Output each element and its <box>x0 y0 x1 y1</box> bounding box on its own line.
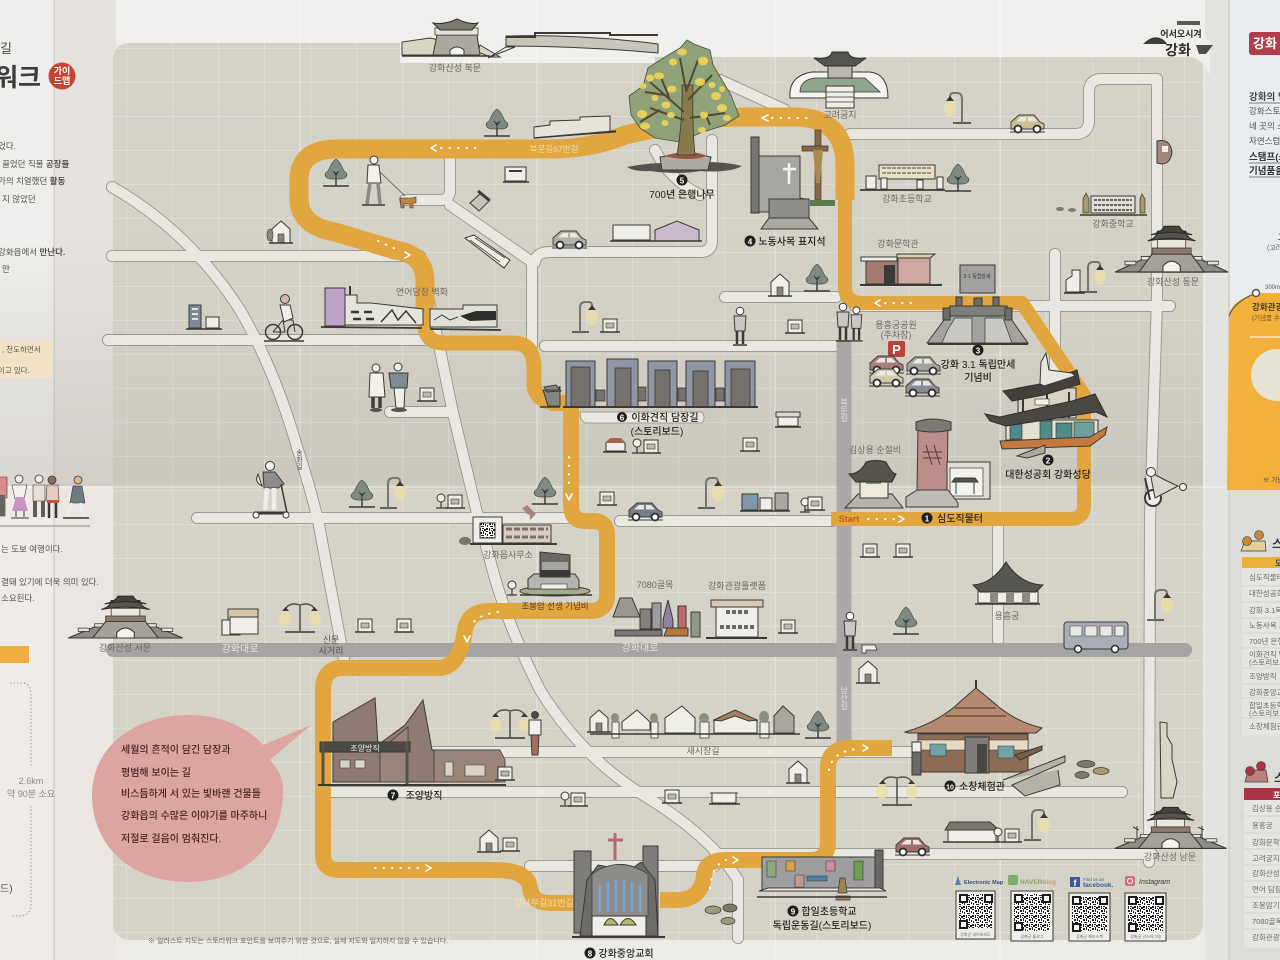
illustration: speech bubble: 세월의 흔적이 담긴 담장과 <box>121 743 231 756</box>
illustration: man with dog, tree and bus <box>843 590 1173 653</box>
QR: electronic map <box>955 876 1004 939</box>
label: route street names <box>514 144 859 908</box>
panel: left text column: 강화읍에서 만난다. <box>0 247 65 257</box>
landmark: 1 Simdo textile site chimney: 1 <box>925 514 930 524</box>
scooter rider <box>253 462 289 518</box>
landmark: west gate <box>68 596 414 656</box>
landmark: Ganghwa elementary school: 강화초등학교 <box>882 194 932 204</box>
panel: right edge column: 용흥궁 <box>1252 820 1273 830</box>
panel: right edge column: 조양방직 <box>1249 671 1277 681</box>
small objects right of chimney and around Yongheung palace <box>800 497 1043 621</box>
panel: right edge column: 고려궁지 <box>1252 853 1280 863</box>
label: route street names: 조봉암 선생 기념비 <box>521 601 589 611</box>
panel: right edge column <box>1227 32 1280 960</box>
illustration: parking area with cars: (주차장) <box>881 329 911 340</box>
landmark: Kim Sang-yong memorial pavilion: 김상용 순절비 <box>849 444 901 455</box>
illustration: couple and scooter rider <box>253 363 437 518</box>
landmark: 10 Sochang experience center <box>905 680 1109 796</box>
illustration: speech bubble: 비스듬하게 서 있는 빛바랜 건물들 <box>121 787 261 800</box>
landmark: 5 700-year ginkgo tree: 5 <box>680 176 685 186</box>
landmark: 9 Habil elementary school <box>757 850 887 932</box>
panel: left text column: 가이 <box>54 65 70 76</box>
panel: left text column: 가의 치열했던 활동 <box>0 176 65 186</box>
illustration: speech bubble: 강화읍의 수많은 이야기를 마주하니 <box>121 809 267 822</box>
landmark: south gate and wall <box>1115 722 1226 862</box>
landmark: Ganghwa literature hall: 강화문학관 <box>877 239 919 249</box>
landmark: middle school and east gate: 강화산성 동문 <box>1147 277 1199 287</box>
logo: welcome to Ganghwa <box>1143 21 1213 58</box>
landmark: 6 Ihwa silk wall storyboard <box>540 359 758 438</box>
road: Bukmun-gil and Namsan-gil gray road: 북문길 <box>840 398 848 422</box>
panel: right edge column: 자연스럽 <box>1249 136 1280 146</box>
landmark: west gate: 사거리 <box>319 646 343 656</box>
illustration: Saesijang-gil street houses <box>489 661 880 756</box>
landmark: 6 Ihwa silk wall storyboard: 6 <box>620 414 625 422</box>
landmark: 7080 alley and tourist platform: 7080골목 <box>637 580 673 590</box>
landmark: 7 Joyang textile mill: 조양방직 <box>350 743 380 753</box>
label: route street names: 북문길67번길 <box>530 144 578 154</box>
panel: left text column: 는 도보 여행이다. <box>1 544 63 554</box>
label: route street names: 향나무길31번길 <box>514 897 574 908</box>
landmark: Goryeo palace site <box>790 52 888 120</box>
landmark: west gate: 신문 <box>323 635 339 645</box>
illustration: parking area with cars: P <box>892 342 901 357</box>
landmark: 5 700-year ginkgo tree <box>627 40 742 201</box>
illustration: biker at east road <box>1145 468 1186 506</box>
illustration: yeoneo wall mural: 연어담장 벽화 <box>396 286 448 297</box>
panel: left text column: 2.6km <box>19 776 43 786</box>
illustration: speech bubble: 평범해 보이는 길 <box>121 766 191 779</box>
landmark: 10 Sochang experience center: 10 <box>946 784 954 792</box>
landmark: south gate and wall: 강화산성 남문 <box>1144 852 1196 862</box>
small house and apartment top-left <box>186 221 293 329</box>
label: route street names: Start <box>839 514 859 524</box>
landmark: north gate and wall <box>402 19 658 73</box>
landmark: 7 Joyang textile mill: 7 <box>391 792 396 800</box>
landmark: 7080 alley and tourist platform <box>613 580 798 638</box>
illustration: cyclist <box>264 294 304 341</box>
logo: welcome to Ganghwa: 어서오시겨 <box>1160 28 1202 39</box>
landmark: Jo Bong-am memorial <box>507 552 592 596</box>
illustration: stones by south road <box>705 904 737 924</box>
landmark: 3 3.1 independence monument: 기념비 <box>964 372 992 384</box>
panel: left text column: 약 90분 소요 <box>7 788 55 799</box>
illustration: parking area with cars: 용흥궁공원 <box>875 319 917 330</box>
landmark: 9 Habil elementary school: 합일초등학교 <box>801 905 857 918</box>
road: Ganghwa-daero gray avenue: 강화대로 <box>622 642 658 654</box>
panel: left text column: 소요된다. <box>1 593 35 603</box>
icon: red route pins <box>1245 762 1268 782</box>
landmark: middle school and east gate <box>1056 193 1228 287</box>
QR: naver blog: NAVERblog <box>1020 879 1056 886</box>
landmark: Ganghwa elementary school <box>860 164 971 204</box>
landmark: 4 labor pastoral memorial stone: 4 <box>748 238 753 246</box>
landmark: Ganghwa literature hall <box>860 239 942 285</box>
QR: instagram: 강화군 인스타그램 <box>1130 933 1161 939</box>
landmark: 2 Anglican cathedral <box>985 353 1107 481</box>
landmark: 4 labor pastoral memorial stone: 노동사목 표지석 <box>758 236 826 248</box>
panel: left text column <box>0 41 99 916</box>
panel: left text column: 만 <box>2 264 10 274</box>
landmark: Kim Sang-yong memorial pavilion <box>845 444 903 508</box>
landmark: 2 Anglican cathedral: 대한성공회 강화성당 <box>1005 468 1091 481</box>
panel: right edge column: 강화스토 <box>1249 106 1280 116</box>
landmark: 6 Ihwa silk wall storyboard: (스토리보드) <box>631 426 683 438</box>
QR: naver blog: 강화군 블로그 <box>1020 933 1044 939</box>
QR: electronic map: 강화군 네이버지도 <box>960 931 991 937</box>
landmark: 5 700-year ginkgo tree: 700년 은행나무 <box>649 189 715 201</box>
white road network <box>108 79 1170 938</box>
illustration: person walking dog and tree <box>323 156 416 208</box>
landmark: 2 Anglican cathedral: 2 <box>1046 456 1051 466</box>
illustration: speech bubble <box>92 715 311 882</box>
landmark: 6 Ihwa silk wall storyboard: 이화견직 담장길 <box>631 411 699 424</box>
logo: welcome to Ganghwa: 강화 <box>1165 42 1191 58</box>
QR: electronic map: Electronic Map <box>964 880 1004 886</box>
illustration: yeoneo wall mural <box>321 286 501 330</box>
landmark: 8 Ganghwa central church <box>572 833 665 960</box>
landmark: 1 Simdo textile site chimney <box>906 419 990 525</box>
QR: instagram <box>1125 876 1170 941</box>
tree and small buildings near literature hall <box>768 262 1106 296</box>
illustration: couple and scooter rider: 송화길 <box>296 449 303 470</box>
panel: left text column: 드) <box>0 884 13 895</box>
panel: right edge column: 강화 <box>1253 36 1277 51</box>
landmark: west gate: 강화산성 서문 <box>99 643 151 653</box>
landmark: Ganghwa-eup office: 강화읍사무소 <box>483 550 533 560</box>
panel: left text column: 결돼 있기에 더욱 의미 있다. <box>1 577 99 587</box>
QR: instagram: Instagram <box>1139 879 1170 886</box>
icon: taxi and lamp on upper road <box>944 93 1172 164</box>
panel: left text column: 지 않았던 <box>2 194 36 204</box>
landmark: 9 Habil elementary school: 9 <box>791 908 796 916</box>
panel: left text column: 길 <box>0 41 12 56</box>
landmark: Goryeo palace site: 고려궁지 <box>823 110 857 120</box>
landmark: 7 Joyang textile mill <box>318 698 506 802</box>
illustration: parking area with cars <box>836 303 941 396</box>
illustration: speech bubble: 저절로 걸음이 멈춰진다. <box>121 832 221 845</box>
illustration: Saesijang-gil street houses: 새시장길 <box>686 746 720 756</box>
panel: left text column: 드맵 <box>54 75 70 86</box>
road: Bukmun-gil and Namsan-gil gray road <box>839 340 848 742</box>
landmark: 3 3.1 independence monument <box>927 265 1028 384</box>
panel: QR codes and social links <box>955 875 1170 941</box>
small objects right of chimney and around Yongheung palace: 용흥궁 <box>995 610 1019 621</box>
road: Ganghwa-daero gray avenue <box>113 642 1185 655</box>
icon: orange route pins <box>1241 530 1266 551</box>
landmark: 4 labor pastoral memorial stone <box>744 130 835 248</box>
QR: facebook: f <box>1074 878 1078 888</box>
landmark: 10 Sochang experience center: 소창체험관 <box>959 780 1005 793</box>
illustration: northern small buildings and tree <box>465 109 702 268</box>
small buildings below storyboard <box>349 302 805 520</box>
road: Bukmun-gil and Namsan-gil gray road: 남산길 <box>839 686 848 710</box>
landmark: 8 Ganghwa central church: 강화중앙교회 <box>598 947 654 960</box>
QR: naver blog <box>1008 875 1056 941</box>
small buildings south of Saesijang-gil <box>477 761 1050 856</box>
landmark: 7 Joyang textile mill: 조양방직 <box>406 789 442 802</box>
panel: left text column: 끌었던 직물 공장들 <box>2 159 69 169</box>
landmark: 8 Ganghwa central church: 8 <box>588 950 593 958</box>
QR: facebook: facebook. <box>1083 882 1114 889</box>
route: orange walking trail <box>299 117 1084 903</box>
route direction dots and arrows <box>375 115 912 888</box>
footnote: ※ 일러스트 지도는 스토리워크 포인트를 보여주기 위한 것으로, 실제 지도와 일치하지 않을 수 있습니다. <box>148 936 448 945</box>
QR: facebook <box>1069 877 1114 941</box>
panel: left text column: , 천도하면서 <box>2 344 41 354</box>
couple <box>369 363 408 412</box>
icon: walking people row <box>0 475 90 526</box>
landmark: 9 Habil elementary school: 독립운동길(스토리보드) <box>773 919 871 932</box>
QR: facebook: 강화군 페이스북 <box>1076 933 1103 939</box>
landmark: 3 3.1 independence monument: 강화 3.1 독립만세 <box>941 358 1015 371</box>
landmark: north gate and wall: 강화산성 북문 <box>429 63 481 73</box>
landmark: 7080 alley and tourist platform: 강화관광플랫폼 <box>708 580 766 591</box>
QR: facebook: Find us on <box>1083 877 1105 882</box>
landmark: Ganghwa-eup office <box>459 505 557 560</box>
landmark: 3 3.1 independence monument: 3·1 독립만세 <box>963 273 991 280</box>
landmark: 3 3.1 independence monument: 3 <box>976 346 981 356</box>
landmark: 1 Simdo textile site chimney: 심도직물터 <box>937 513 983 525</box>
road: Ganghwa-daero gray avenue: 강화대로 <box>222 643 258 655</box>
panel: right edge column: 300m <box>1265 285 1280 291</box>
landmark: middle school and east gate: 강화중학교 <box>1092 219 1134 229</box>
